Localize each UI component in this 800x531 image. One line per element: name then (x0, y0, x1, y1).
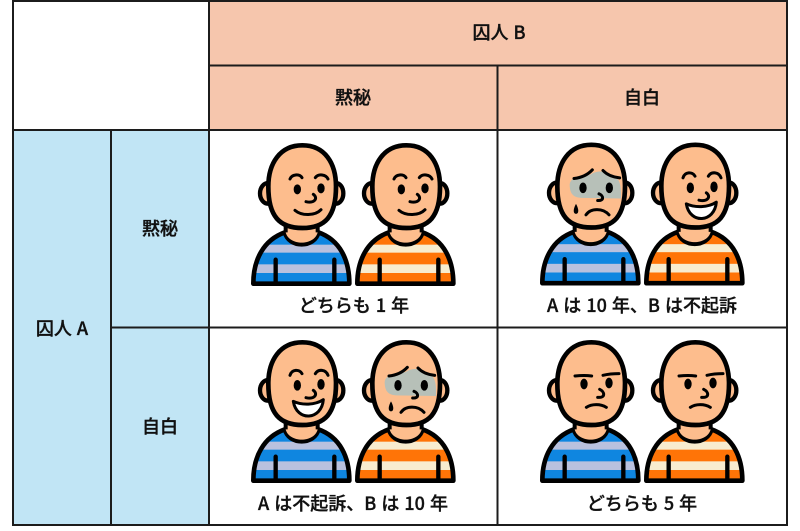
text: outcome: どちらも 1 年 (299, 292, 409, 318)
heading: B silent: 黙秘 (335, 84, 371, 110)
text: outcome: A は不起訴、B は 10 年 (258, 490, 448, 516)
icon: prisoner A grinning (250, 342, 353, 481)
icon: prisoner A stern (539, 342, 642, 481)
panel: both silent (250, 145, 457, 318)
icon: prisoner A crying (539, 145, 642, 283)
text: outcome: どちらも 5 年 (587, 490, 697, 516)
icon: prisoner B stern (643, 342, 746, 481)
panel: both confess (539, 342, 746, 516)
heading: A confess: 自白 (142, 413, 178, 439)
icon: prisoner B grinning (643, 145, 746, 283)
heading: A silent: 黙秘 (142, 215, 178, 241)
heading: prisoner A: 囚人 A (36, 315, 89, 341)
text: outcome: A は 10 年、B は不起訴 (547, 292, 737, 318)
panel: prisoner B header background (209, 1, 787, 130)
icon: prisoner A smiling (250, 145, 353, 284)
panel: A silent, B confesses (539, 145, 746, 318)
icon: prisoner B crying (354, 342, 457, 481)
panel: prisoner A header background (13, 130, 209, 525)
heading: B confess: 自白 (624, 84, 660, 110)
icon: prisoner B smiling (354, 145, 457, 284)
heading: prisoner B: 囚人 B (472, 19, 526, 45)
panel: A confesses, B silent (250, 342, 457, 516)
